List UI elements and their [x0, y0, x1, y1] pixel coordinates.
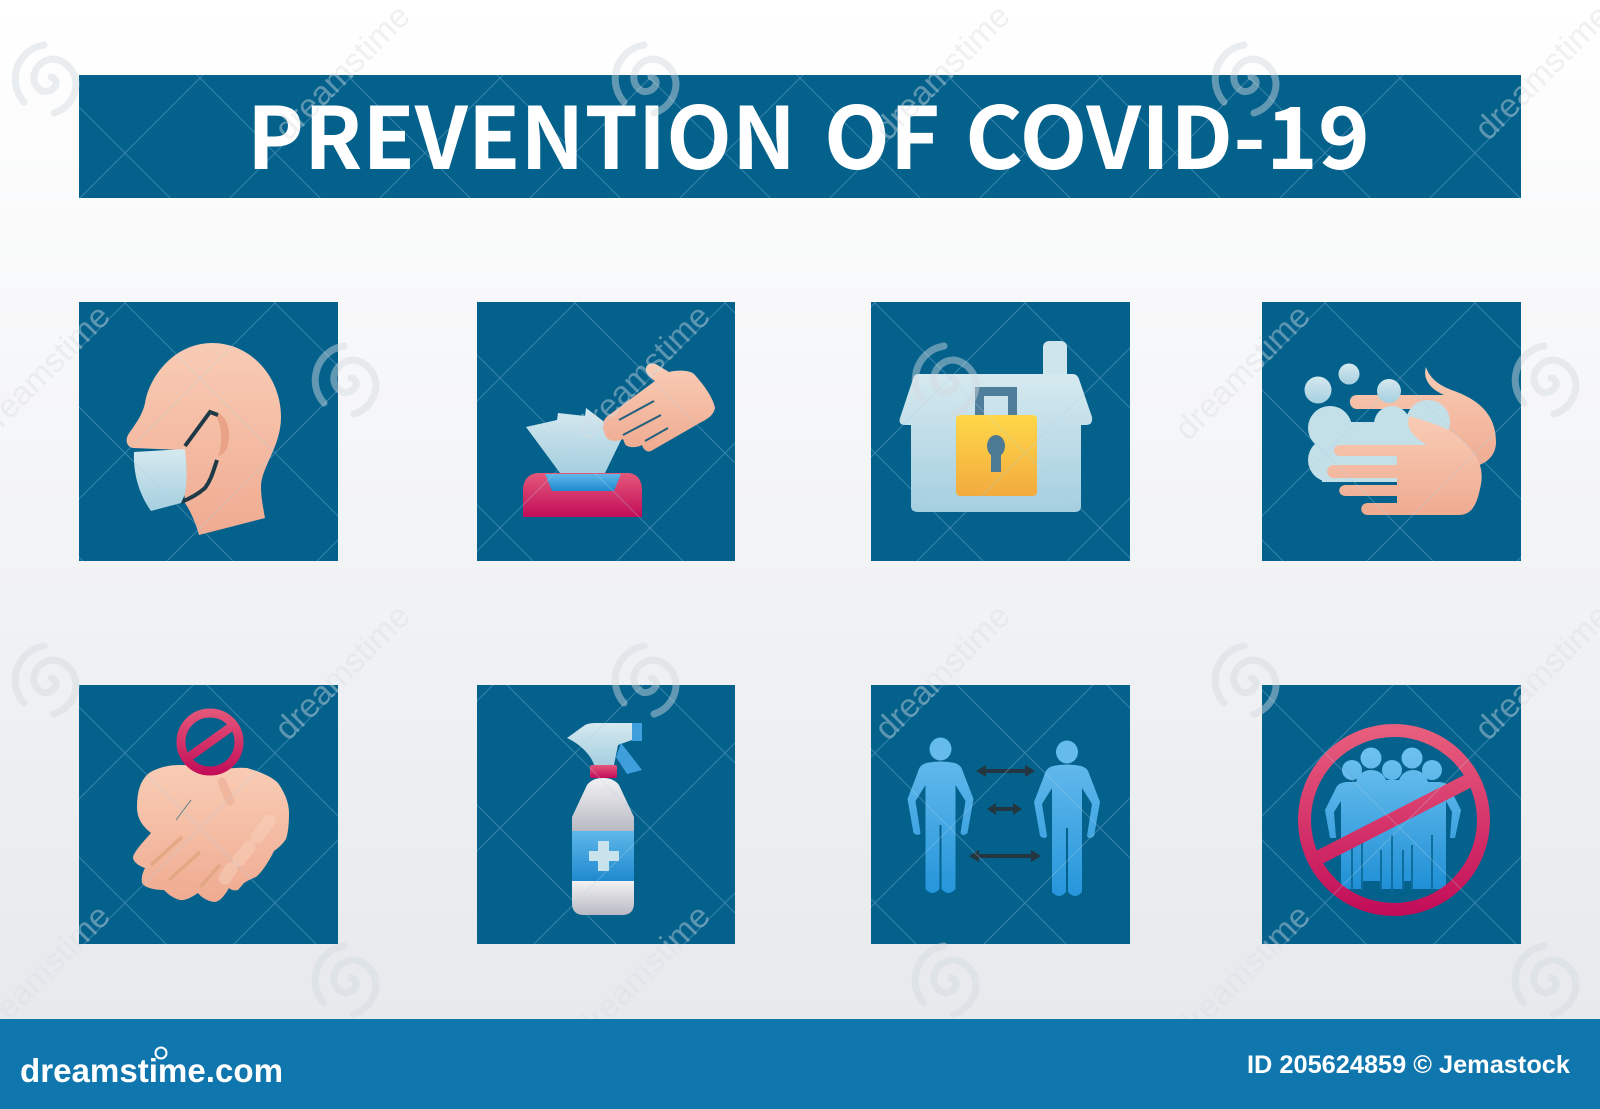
watermarks: dreamstime: [267, 597, 417, 747]
footer bar: [0, 1019, 1600, 1109]
icon: person right: [1034, 740, 1100, 896]
title banner: COVID-19: [965, 69, 1370, 194]
panel: wash hands: [1262, 302, 1521, 561]
panel: wear a face mask: [79, 302, 338, 561]
title banner: [79, 69, 1521, 198]
arrow: top distance: [976, 765, 1035, 777]
icon: prohibition ring: [1304, 730, 1484, 910]
watermarks: dreamstime: [1167, 297, 1317, 447]
panel: avoid crowds: [1262, 685, 1521, 944]
panel: keep distance: [871, 685, 1130, 944]
panel: use tissues: [477, 302, 735, 561]
icon: soapy hands: [1304, 364, 1496, 515]
watermarks: dreamstime: [267, 0, 417, 147]
footer bar: dreamstime.com: [20, 1052, 283, 1089]
panel: stay at home: [871, 302, 1130, 561]
watermarks: dreamstime: [1167, 897, 1317, 1047]
title banner: PREVENTION: [247, 69, 796, 194]
watermarks: dreamstime: [567, 297, 717, 447]
icon: person left: [908, 738, 974, 893]
icon: small prohibition sign: [181, 713, 239, 771]
panel: no handshake: [79, 685, 338, 944]
icon: tissue box and hand: [523, 364, 715, 517]
icon: house with padlock: [900, 341, 1092, 512]
icon: spray bottle: [567, 723, 642, 915]
footer bar: ID 205624859 © Jemastock: [1247, 1051, 1570, 1079]
title banner: OF: [824, 69, 940, 194]
arrow: bottom distance: [969, 850, 1041, 862]
watermarks: dreamstime: [867, 0, 1017, 147]
icon: head in profile with mask: [127, 343, 281, 535]
arrow: middle distance: [987, 803, 1022, 815]
icon: crowd of people: [1325, 748, 1461, 891]
watermarks: dreamstime: [567, 897, 717, 1047]
icon: clasped hands: [133, 765, 289, 902]
panel: disinfectant spray: [477, 685, 735, 944]
watermarks: dreamstime: [867, 597, 1017, 747]
